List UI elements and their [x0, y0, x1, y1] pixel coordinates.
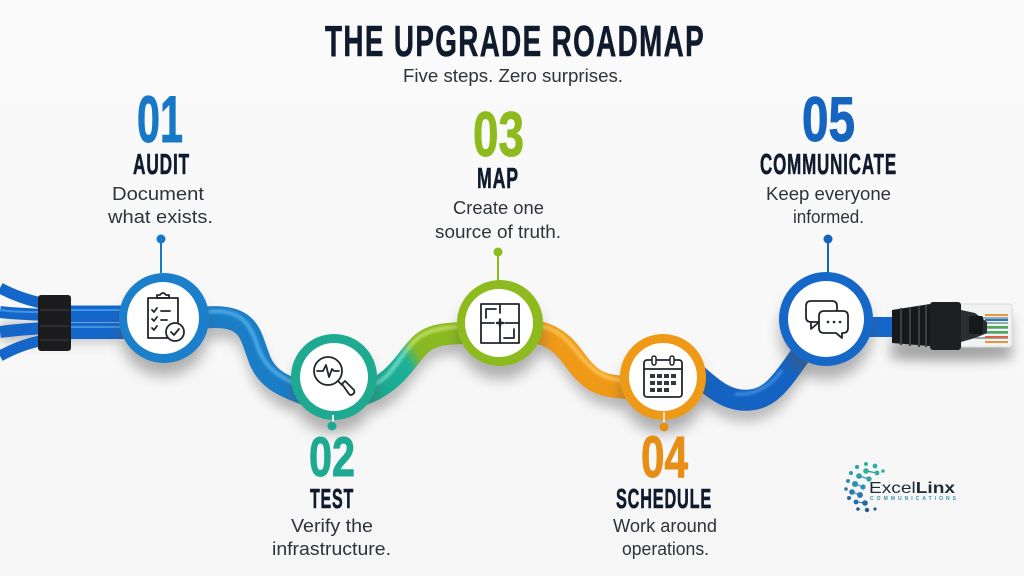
step 3 number: 03 — [473, 100, 524, 170]
icon: calendar — [644, 356, 682, 397]
icon: dotted globe — [844, 462, 885, 512]
step 1 connector — [156, 234, 166, 273]
step 2 text — [272, 516, 391, 559]
step 3 — [435, 100, 561, 379]
step 2 text: infrastructure. — [272, 539, 391, 559]
cable segment 3 to 4 — [530, 326, 635, 388]
step 5 node — [779, 272, 873, 379]
logo: ExcelLinx Communications — [844, 462, 957, 512]
step 4 text: Work around — [613, 516, 717, 536]
step 3 text — [435, 198, 561, 242]
step 1 — [107, 82, 213, 376]
cable bundle left — [0, 288, 125, 356]
cable shadows — [0, 317, 1012, 412]
step 1 text — [107, 184, 213, 227]
step 5 — [760, 85, 897, 379]
step 2 number: 02 — [309, 425, 355, 488]
icon: clipboard checklist — [148, 293, 184, 341]
step 2 text: Verify the — [291, 516, 373, 536]
wordmark tagline: COMMUNICATIONS — [870, 496, 957, 502]
RJ45 plug — [868, 302, 1012, 361]
step 1 node — [119, 273, 209, 376]
step 2 heading: TEST — [310, 483, 354, 514]
step 5 connector — [824, 234, 832, 273]
step 1 text: Document — [112, 184, 204, 204]
step 4 text — [613, 516, 717, 559]
step 5 heading: COMMUNICATE — [760, 149, 897, 181]
step 5 number: 05 — [802, 85, 855, 155]
step 2 node — [291, 334, 377, 433]
step 2 — [272, 334, 391, 559]
step 4 text: operations. — [622, 539, 709, 559]
step 4 connector — [660, 412, 668, 432]
cable tie — [38, 295, 71, 351]
wordmark: Excel Linx — [869, 480, 955, 497]
icon: floor plan — [481, 304, 519, 343]
cable segment 4 to 5 — [690, 335, 815, 400]
step 3 text: source of truth. — [435, 222, 561, 242]
step 4 number: 04 — [641, 425, 688, 490]
step 1 number: 01 — [137, 82, 183, 156]
step 4 heading: SCHEDULE — [616, 483, 712, 514]
subtitle: Five steps. Zero surprises. — [403, 66, 623, 86]
step 4 node — [620, 334, 706, 433]
step 5 text — [766, 184, 891, 227]
step 1 text: what exists. — [107, 207, 213, 227]
title: THE UPGRADE ROADMAP — [325, 17, 705, 66]
step 2 connector — [328, 415, 336, 430]
icon: chat bubbles — [806, 301, 848, 338]
step 3 heading: MAP — [477, 163, 519, 195]
icon: magnifier with pulse — [314, 357, 354, 395]
step 1 heading: AUDIT — [133, 149, 190, 181]
step 3 connector — [494, 248, 502, 282]
step 4 — [613, 334, 717, 559]
step 5 text: informed. — [793, 207, 864, 227]
cable segment 2 to 3 — [358, 327, 470, 396]
step 3 text: Create one — [453, 198, 544, 218]
step 5 text: Keep everyone — [766, 184, 891, 204]
cable segment 1 to 2 — [200, 311, 310, 396]
step 3 node — [457, 280, 543, 379]
